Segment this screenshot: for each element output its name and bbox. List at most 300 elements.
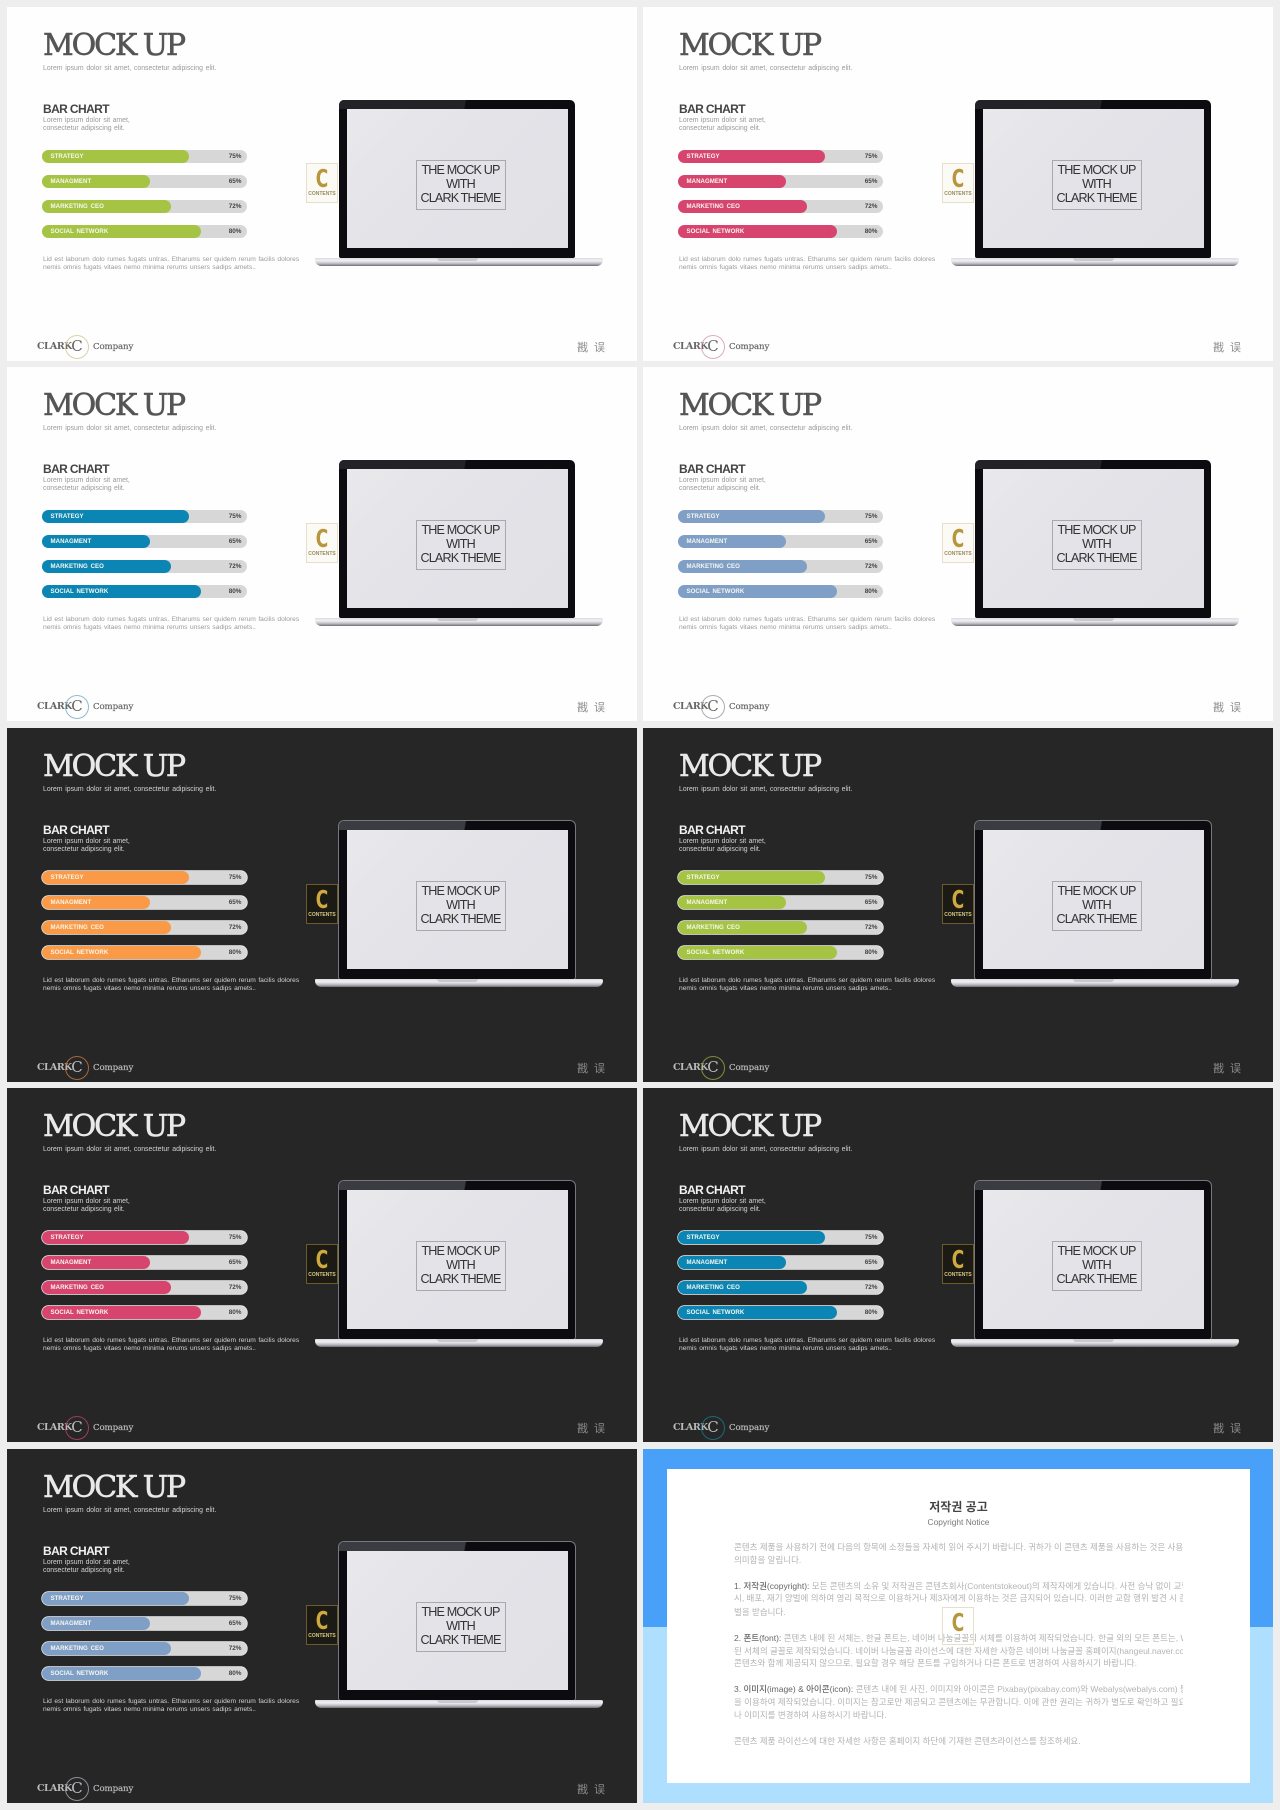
- notice intro: [667, 1541, 1250, 1567]
- icon: logo badge: CONTENTS: [944, 191, 972, 197]
- footer brand: C: [71, 337, 83, 355]
- bar: marketing ceo: [678, 200, 882, 212]
- screen caption: [1052, 520, 1142, 570]
- footer brand: Company: [93, 1063, 133, 1073]
- bar: social network: 80%: [229, 228, 242, 234]
- icon: logo badge: CONTENTS: [944, 912, 972, 918]
- screen caption: WITH: [446, 1258, 475, 1272]
- bar: strategy: STRATEGY: [50, 874, 84, 880]
- icon: logo badge: C: [952, 885, 964, 914]
- icon: logo badge: C: [316, 524, 328, 553]
- icon: logo badge: C: [316, 885, 328, 914]
- bar: social network: SOCIAL NETWORK: [50, 948, 108, 956]
- screen caption: THE MOCK UP: [421, 523, 500, 537]
- screen caption: [416, 520, 506, 570]
- bar: strategy: 75%: [229, 1234, 242, 1240]
- footer brand: CLARK: [673, 1062, 708, 1073]
- footer brand: [673, 695, 770, 719]
- bar: managment: 65%: [229, 538, 242, 544]
- bar: managment: MANAGMENT: [686, 538, 727, 544]
- laptop: [951, 1180, 1239, 1347]
- panel: dark pink: [7, 1088, 637, 1442]
- bar: social network: 80%: [229, 1308, 242, 1316]
- screen caption: THE MOCK UP: [421, 1605, 500, 1619]
- description: Lorem ipsum dolor sit amet,: [43, 838, 130, 845]
- footer brand: Company: [93, 1784, 133, 1794]
- bar: social network: SOCIAL NETWORK: [686, 1308, 744, 1316]
- bar: managment: 65%: [229, 1620, 242, 1626]
- bar: strategy: 75%: [229, 874, 242, 880]
- bar: managment: [42, 174, 246, 188]
- description: consectetur adipiscing elit.: [679, 1206, 761, 1213]
- bar: managment: MANAGMENT: [50, 1258, 91, 1266]
- subtitle: Lorem ipsum dolor sit amet, consectetur adipiscing elit.: [43, 425, 216, 432]
- heading: BAR CHART: [43, 1544, 109, 1558]
- bar chart: [678, 510, 883, 598]
- bar: social network: 80%: [865, 588, 878, 594]
- bar: strategy: STRATEGY: [50, 152, 84, 160]
- body text: nemis omnis fugats vitaes nemo minima rerums unsers sadips amets..: [43, 1706, 256, 1713]
- bar: marketing ceo: MARKETING CEO: [686, 562, 740, 570]
- bar: marketing ceo: 72%: [229, 562, 242, 570]
- bar: marketing ceo: 72%: [865, 1284, 878, 1290]
- body text: [43, 1336, 299, 1352]
- icon: logo badge: C: [952, 524, 964, 553]
- bar: managment: [42, 1616, 246, 1630]
- bar: social network: 80%: [229, 588, 242, 594]
- bar: marketing ceo: [678, 1280, 882, 1294]
- subtitle: Lorem ipsum dolor sit amet, consectetur adipiscing elit.: [679, 1146, 852, 1153]
- panel: dark blue: [643, 1088, 1273, 1442]
- bar: managment: [678, 174, 882, 188]
- screen caption: CLARK THEME: [420, 1272, 500, 1286]
- body text: [679, 256, 935, 271]
- footer brand: CLARK: [37, 1422, 72, 1433]
- bar: social network: 80%: [229, 1670, 242, 1676]
- description: [43, 116, 130, 132]
- bar: marketing ceo: [42, 1642, 246, 1654]
- description: [679, 838, 766, 853]
- icon: logo badge: C: [316, 164, 328, 193]
- laptop: [951, 460, 1239, 626]
- screen caption: CLARK THEME: [420, 191, 500, 205]
- title: MOCK UP: [679, 28, 820, 63]
- bar: social network: SOCIAL NETWORK: [50, 588, 108, 594]
- description: [679, 476, 766, 492]
- screen caption: [416, 160, 506, 210]
- bar: strategy: STRATEGY: [686, 512, 720, 520]
- description: consectetur adipiscing elit.: [43, 1206, 125, 1213]
- footer brand: Company: [729, 1063, 769, 1073]
- bar: strategy: 75%: [865, 512, 878, 520]
- bar: strategy: STRATEGY: [50, 1234, 84, 1240]
- body text: [43, 976, 299, 992]
- footer brand: CLARK: [37, 341, 72, 352]
- notice intro: 의미함을 알립니다.: [734, 1555, 801, 1565]
- footer mark: 戡误: [577, 1063, 611, 1075]
- icon: logo badge: CONTENTS: [308, 1633, 336, 1639]
- bar: strategy: STRATEGY: [686, 874, 720, 880]
- bar: marketing ceo: [42, 1280, 246, 1294]
- footer brand: Company: [729, 342, 769, 352]
- bar: social network: SOCIAL NETWORK: [50, 228, 108, 234]
- body text: nemis omnis fugats vitaes nemo minima rerums unsers sadips amets..: [43, 985, 256, 992]
- description: [679, 1198, 766, 1213]
- bar: strategy: STRATEGY: [686, 152, 720, 160]
- icon: logo badge: [942, 884, 974, 924]
- bar chart: [42, 510, 247, 598]
- description: consectetur adipiscing elit.: [679, 846, 761, 853]
- body text: [679, 976, 935, 992]
- bar: managment: 65%: [229, 898, 242, 906]
- footer brand: C: [707, 697, 719, 715]
- body text: nemis omnis fugats vitaes nemo minima rerums unsers sadips amets..: [43, 264, 256, 271]
- bar: social network: [678, 584, 882, 598]
- bar: managment: [678, 1256, 882, 1268]
- bar chart: [678, 150, 883, 238]
- bar: social network: [678, 946, 882, 958]
- subtitle: Lorem ipsum dolor sit amet, consectetur adipiscing elit.: [43, 1146, 216, 1153]
- bar: marketing ceo: MARKETING CEO: [50, 924, 104, 930]
- heading: BAR CHART: [679, 1183, 745, 1197]
- icon: logo badge: [306, 163, 338, 203]
- bar chart: [42, 1592, 248, 1680]
- footer brand: CLARK: [37, 1062, 72, 1073]
- screen caption: THE MOCK UP: [421, 1244, 500, 1258]
- footer brand: CLARK: [673, 341, 708, 352]
- notice sheet: [667, 1469, 1250, 1783]
- title: MOCK UP: [43, 388, 184, 423]
- description: Lorem ipsum dolor sit amet,: [43, 477, 130, 484]
- bar: managment: 65%: [865, 538, 878, 544]
- icon: logo badge: C: [952, 1608, 964, 1637]
- bar: marketing ceo: 72%: [865, 562, 878, 570]
- bar: marketing ceo: [42, 200, 246, 212]
- description: Lorem ipsum dolor sit amet,: [679, 1198, 766, 1205]
- notice closing: 콘텐츠 제품 라이선스에 대한 자세한 사항은 홈페이지 하단에 기재한 콘텐츠라이선스를 참조하세요.: [734, 1736, 1081, 1746]
- bar: marketing ceo: 72%: [229, 1284, 242, 1290]
- bar: marketing ceo: [42, 560, 246, 572]
- bar: social network: 80%: [865, 1308, 878, 1316]
- icon: logo badge: [942, 523, 974, 563]
- footer brand: Company: [93, 1423, 133, 1433]
- bar: marketing ceo: MARKETING CEO: [686, 202, 740, 210]
- icon: logo badge: CONTENTS: [944, 1272, 972, 1278]
- notice section 2: [667, 1632, 1250, 1670]
- description: Lorem ipsum dolor sit amet,: [679, 477, 766, 484]
- screen caption: [1052, 1241, 1142, 1291]
- icon: logo badge: C: [316, 1606, 328, 1635]
- footer brand: [673, 1416, 770, 1440]
- bar chart: [677, 870, 884, 960]
- footer mark: 戡误: [1213, 342, 1247, 354]
- heading: BAR CHART: [679, 462, 745, 476]
- bar: marketing ceo: MARKETING CEO: [50, 562, 104, 570]
- footer brand: C: [707, 337, 719, 355]
- screen caption: THE MOCK UP: [1057, 1244, 1136, 1258]
- screen caption: [1052, 160, 1142, 210]
- footer brand: Company: [93, 702, 133, 712]
- icon: logo badge: [306, 1244, 338, 1284]
- screen caption: [1052, 881, 1142, 931]
- bar: strategy: [678, 1230, 882, 1244]
- screen caption: [416, 1241, 506, 1291]
- description: consectetur adipiscing elit.: [43, 1567, 125, 1574]
- bar: social network: SOCIAL NETWORK: [686, 588, 744, 594]
- screen caption: THE MOCK UP: [421, 163, 500, 177]
- body text: Lid est laborum dolo rumes fugats untras. Etharums ser quidem rerum facilis dolores: [679, 1336, 935, 1344]
- description: [43, 838, 130, 853]
- bar: managment: 65%: [229, 178, 242, 184]
- bar: strategy: STRATEGY: [50, 1594, 84, 1602]
- screen caption: CLARK THEME: [420, 551, 500, 565]
- footer brand: C: [71, 1779, 83, 1797]
- heading: BAR CHART: [43, 823, 109, 837]
- heading: BAR CHART: [43, 462, 109, 476]
- bar: marketing ceo: MARKETING CEO: [50, 1644, 104, 1652]
- screen caption: THE MOCK UP: [1057, 884, 1136, 898]
- bar: strategy: 75%: [865, 152, 878, 160]
- body text: [43, 616, 299, 631]
- bar: strategy: 75%: [229, 512, 242, 520]
- panel: copyright notice: [643, 1449, 1273, 1803]
- heading: BAR CHART: [679, 102, 745, 116]
- icon: logo badge: C: [316, 1245, 328, 1274]
- body text: Lid est laborum dolo rumes fugats untras. Etharums ser quidem rerum facilis dolores: [43, 616, 299, 622]
- body text: Lid est laborum dolo rumes fugats untras. Etharums ser quidem rerum facilis dolores: [43, 976, 299, 984]
- screen caption: WITH: [446, 1619, 475, 1633]
- description: [679, 116, 766, 132]
- panel: dark periwinkle: [7, 1449, 637, 1803]
- laptop: [315, 460, 603, 626]
- bar: strategy: [678, 150, 882, 162]
- footer brand: CLARK: [37, 1783, 72, 1794]
- screen caption: WITH: [1082, 537, 1111, 551]
- body text: nemis omnis fugats vitaes nemo minima rerums unsers sadips amets..: [679, 1345, 892, 1352]
- body text: Lid est laborum dolo rumes fugats untras. Etharums ser quidem rerum facilis dolores: [679, 256, 935, 262]
- footer brand: [37, 1056, 134, 1080]
- icon: logo badge: [942, 1607, 974, 1645]
- panel: light pink: [643, 7, 1273, 361]
- body text: nemis omnis fugats vitaes nemo minima rerums unsers sadips amets..: [679, 624, 892, 631]
- bar: marketing ceo: 72%: [229, 202, 242, 210]
- bar: marketing ceo: MARKETING CEO: [686, 924, 740, 930]
- footer brand: [673, 1056, 770, 1080]
- bar: social network: 80%: [229, 948, 242, 956]
- body text: [43, 1698, 299, 1714]
- title: MOCK UP: [43, 749, 184, 784]
- screen caption: THE MOCK UP: [1057, 163, 1136, 177]
- bar: social network: [42, 1666, 246, 1680]
- body text: nemis omnis fugats vitaes nemo minima rerums unsers sadips amets..: [43, 1345, 256, 1352]
- bar: marketing ceo: [678, 920, 882, 934]
- bar: managment: [42, 1256, 246, 1268]
- notice section 3: [667, 1683, 1250, 1721]
- screen caption: THE MOCK UP: [421, 884, 500, 898]
- description: consectetur adipiscing elit.: [43, 846, 125, 853]
- body text: [679, 1336, 935, 1352]
- bar: social network: SOCIAL NETWORK: [686, 228, 744, 234]
- bar: marketing ceo: [42, 920, 246, 934]
- bar: social network: 80%: [865, 948, 878, 956]
- bar: social network: 80%: [865, 228, 878, 234]
- panel: light blue: [7, 367, 637, 721]
- icon: logo badge: CONTENTS: [308, 1272, 336, 1278]
- notice section 3: 나 이미지를 변경하여 사용하시기 바랍니다.: [734, 1710, 887, 1720]
- footer brand: Company: [93, 342, 133, 352]
- body text: Lid est laborum dolo rumes fugats untras. Etharums ser quidem rerum facilis dolores: [43, 1698, 299, 1704]
- icon: logo badge: CONTENTS: [308, 551, 336, 557]
- footer mark: 戡误: [577, 1784, 611, 1796]
- bar: strategy: STRATEGY: [50, 512, 84, 520]
- laptop: [315, 1541, 605, 1711]
- footer brand: C: [71, 1418, 83, 1436]
- bar: managment: 65%: [865, 898, 878, 906]
- title: MOCK UP: [679, 749, 820, 784]
- subtitle: Lorem ipsum dolor sit amet, consectetur adipiscing elit.: [43, 1507, 216, 1514]
- screen caption: WITH: [1082, 1258, 1111, 1272]
- bar: marketing ceo: 72%: [229, 924, 242, 930]
- body text: nemis omnis fugats vitaes nemo minima rerums unsers sadips amets..: [679, 264, 892, 271]
- bar: strategy: [678, 510, 882, 522]
- screen caption: WITH: [446, 537, 475, 551]
- subtitle: Lorem ipsum dolor sit amet, consectetur adipiscing elit.: [43, 65, 216, 72]
- heading: BAR CHART: [679, 823, 745, 837]
- icon: logo badge: [306, 1605, 338, 1645]
- panel: light periwinkle: [643, 367, 1273, 721]
- screen caption: CLARK THEME: [1056, 191, 1136, 205]
- screen caption: CLARK THEME: [1056, 912, 1136, 926]
- bar: strategy: [42, 870, 246, 884]
- icon: logo badge: [306, 884, 338, 924]
- description: Lorem ipsum dolor sit amet,: [679, 838, 766, 845]
- laptop: [315, 100, 603, 266]
- icon: logo badge: [942, 1244, 974, 1284]
- description: Lorem ipsum dolor sit amet,: [43, 1198, 130, 1205]
- subtitle: Lorem ipsum dolor sit amet, consectetur adipiscing elit.: [679, 425, 852, 432]
- bar: marketing ceo: MARKETING CEO: [50, 1284, 104, 1290]
- screen caption: CLARK THEME: [420, 912, 500, 926]
- bar: managment: [678, 534, 882, 548]
- description: [43, 476, 130, 492]
- bar: marketing ceo: [678, 560, 882, 572]
- screen caption: WITH: [446, 177, 475, 191]
- bar: social network: [678, 224, 882, 238]
- bar: social network: [678, 1306, 882, 1318]
- heading: BAR CHART: [43, 102, 109, 116]
- laptop: [951, 100, 1239, 266]
- bar: strategy: 75%: [865, 1234, 878, 1240]
- title: MOCK UP: [679, 388, 820, 423]
- footer mark: 戡误: [577, 1423, 611, 1435]
- screen caption: WITH: [1082, 898, 1111, 912]
- bar: marketing ceo: 72%: [865, 924, 878, 930]
- bar chart: [42, 150, 247, 238]
- body text: [679, 616, 935, 631]
- icon: logo badge: C: [952, 164, 964, 193]
- footer brand: [37, 695, 134, 719]
- screen caption: CLARK THEME: [1056, 1272, 1136, 1286]
- footer brand: Company: [729, 702, 769, 712]
- bar chart: [41, 870, 248, 960]
- bar: marketing ceo: MARKETING CEO: [686, 1284, 740, 1290]
- footer brand: CLARK: [673, 1422, 708, 1433]
- screen caption: CLARK THEME: [1056, 551, 1136, 565]
- footer mark: 戡误: [1213, 702, 1247, 714]
- bar: strategy: 75%: [229, 152, 242, 160]
- laptop: [315, 1180, 603, 1347]
- laptop: [951, 820, 1239, 987]
- screen caption: CLARK THEME: [420, 1633, 500, 1647]
- body text: [43, 256, 299, 271]
- icon: logo badge: CONTENTS: [308, 912, 336, 918]
- notice section 2: 콘텐츠와 함께 제공되지 않으므로, 필요할 경우 해당 폰트를 구입하거나 다른 폰트로 변경하여 사용하시기 바랍니다.: [734, 1658, 1137, 1668]
- footer brand: CLARK: [37, 701, 72, 712]
- footer brand: C: [71, 1058, 83, 1076]
- bar: managment: MANAGMENT: [686, 898, 727, 906]
- bar: managment: MANAGMENT: [50, 178, 91, 184]
- title: MOCK UP: [43, 1109, 184, 1144]
- bar: strategy: [42, 510, 246, 522]
- bar: managment: MANAGMENT: [686, 178, 727, 184]
- footer brand: Company: [729, 1423, 769, 1433]
- footer mark: 戡误: [1213, 1063, 1247, 1075]
- description: [43, 1559, 130, 1575]
- screen caption: [416, 1602, 506, 1652]
- footer mark: 戡误: [577, 702, 611, 714]
- laptop: [315, 820, 603, 987]
- bar: marketing ceo: 72%: [229, 1644, 242, 1652]
- body text: Lid est laborum dolo rumes fugats untras. Etharums ser quidem rerum facilis dolores: [43, 256, 299, 262]
- bar: managment: 65%: [865, 178, 878, 184]
- bar: strategy: [42, 1230, 246, 1244]
- bar: social network: [42, 1306, 246, 1318]
- panel: dark green: [643, 728, 1273, 1082]
- description: consectetur adipiscing elit.: [679, 485, 761, 492]
- bar chart: [41, 1230, 248, 1320]
- subtitle: Lorem ipsum dolor sit amet, consectetur adipiscing elit.: [43, 786, 216, 793]
- bar: social network: [42, 224, 246, 238]
- body text: Lid est laborum dolo rumes fugats untras. Etharums ser quidem rerum facilis dolores: [679, 616, 935, 622]
- bar: social network: [42, 946, 246, 958]
- bar: marketing ceo: 72%: [865, 202, 878, 210]
- panel: light green: [7, 7, 637, 361]
- notice subtitle: Copyright Notice: [928, 1517, 989, 1527]
- title: MOCK UP: [43, 28, 184, 63]
- footer brand: C: [707, 1058, 719, 1076]
- screen caption: THE MOCK UP: [1057, 523, 1136, 537]
- bar: managment: MANAGMENT: [50, 538, 91, 544]
- bar: managment: MANAGMENT: [50, 898, 91, 906]
- bar: strategy: [42, 1592, 246, 1604]
- icon: logo badge: C: [952, 1245, 964, 1274]
- description: consectetur adipiscing elit.: [43, 485, 125, 492]
- bar: managment: 65%: [229, 1258, 242, 1266]
- icon: logo badge: [306, 523, 338, 563]
- subtitle: Lorem ipsum dolor sit amet, consectetur adipiscing elit.: [679, 786, 852, 793]
- bar: marketing ceo: MARKETING CEO: [50, 202, 104, 210]
- screen caption: [416, 881, 506, 931]
- footer brand: [673, 335, 770, 359]
- footer brand: [37, 335, 134, 359]
- title: MOCK UP: [679, 1109, 820, 1144]
- bar: managment: MANAGMENT: [686, 1258, 727, 1266]
- footer brand: [37, 1777, 137, 1801]
- bar: strategy: STRATEGY: [686, 1234, 720, 1240]
- footer brand: C: [71, 697, 83, 715]
- bar: managment: [678, 896, 882, 908]
- icon: logo badge: [942, 163, 974, 203]
